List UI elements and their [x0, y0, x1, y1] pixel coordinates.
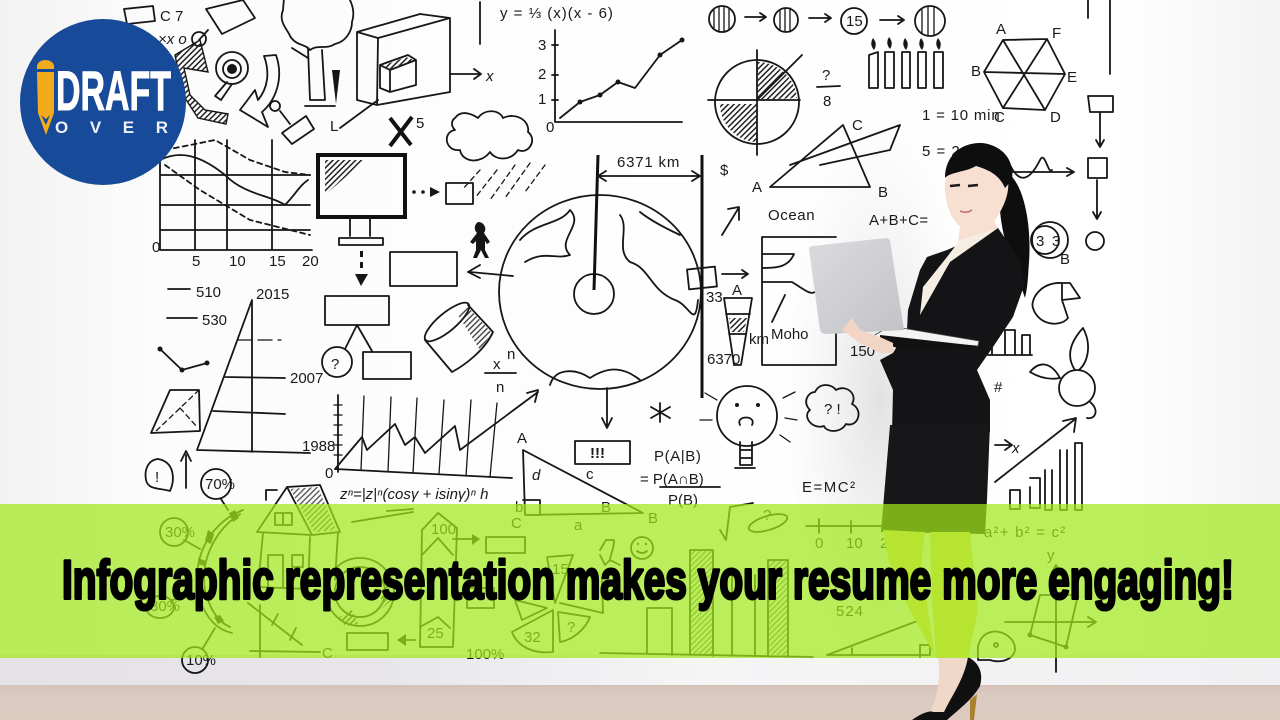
- sketch: equations middle right: A+B+C=: [869, 212, 929, 229]
- translucent green band: [0, 504, 1280, 658]
- sketch: a²+b²=c² and coordinate graph: a²+ b² = c²: [984, 524, 1066, 541]
- sketch: hexagon: B: [971, 63, 981, 80]
- sketch: X 5: [390, 115, 424, 146]
- sketch: tree: [282, 0, 353, 106]
- sketch: fruit and leaves: [994, 328, 1096, 418]
- sketch: pie with fraction: [708, 50, 840, 155]
- sketch: arrow tower and boxes: [420, 499, 525, 663]
- jacket: [880, 228, 1025, 432]
- sketch: exclamation bubble and percents: 30%: [165, 524, 195, 541]
- wooden floor: [0, 685, 1280, 720]
- sketch: lower left graph, ring and arrows: [248, 509, 415, 662]
- sketch: right triangle with !!!: d: [532, 467, 541, 484]
- sketch: line graph left: [152, 140, 319, 270]
- logo: iDraft Over badge: [20, 19, 186, 185]
- sketch: right triangle with !!!: !!!: [590, 445, 605, 462]
- sketch: number line and wedge under band: 524: [836, 603, 864, 620]
- sketch: pie fan and smile: 15: [552, 561, 569, 578]
- sketch: pyramid chart: [151, 284, 335, 455]
- logo wordmark DRAFT: DRAFT: [56, 59, 171, 122]
- sketch: equations middle right: 1 = 10 min: [922, 107, 1000, 124]
- sketch: arrow tower and boxes: b: [515, 499, 523, 516]
- sketch: right triangle with !!!: a: [574, 517, 583, 534]
- sketch: right triangle with !!!: A: [517, 430, 527, 447]
- sketch: equations middle right: 5 = 2: [922, 143, 961, 160]
- sketch: a²+b²=c² and coordinate graph: [978, 524, 1096, 672]
- sketch: pie with fraction: ?: [822, 67, 830, 84]
- sketch: cylinder and x^n/n: n: [507, 346, 515, 363]
- sketch: triangle with dollar: [720, 117, 900, 235]
- sketch: pyramid chart: 510: [196, 284, 221, 301]
- sketch: cylinder and x^n/n: x: [493, 356, 501, 373]
- sketch: triangle with dollar: $: [720, 162, 729, 179]
- ponytail: [999, 172, 1030, 298]
- eyes and lips: [950, 185, 978, 186]
- sketch: globe with radius: 6371 km: [617, 154, 680, 171]
- logo wordmark OVER: OVER: [55, 118, 168, 137]
- sketch: flow diagram under monitor: ?: [331, 356, 339, 373]
- sketch: cone core diagram: [706, 282, 769, 368]
- sketch: thought cloud: [651, 385, 859, 431]
- sketch: probability formula: = P(A∩B): [640, 471, 704, 488]
- sketch: right triangle with !!!: [511, 430, 658, 534]
- sketch: ocean cross-section: Ocean: [768, 207, 815, 224]
- sketch: 3D cube with axis: L: [330, 118, 338, 135]
- sketch: globe with radius: [468, 154, 702, 428]
- sketch: paper figure: [470, 222, 490, 258]
- sketch: X 5: 5: [416, 115, 424, 132]
- sketch: fruit and leaves: #: [994, 379, 1003, 396]
- sketch: cloud with rain: [447, 111, 545, 200]
- sketch: cone core diagram: 33: [706, 289, 723, 306]
- woman's shadow on wall: [785, 110, 975, 690]
- sketch: line chart top: 1: [538, 91, 546, 108]
- sketch: arrow tower and boxes: 100: [431, 521, 456, 538]
- sketch: growth bar-line chart: [325, 390, 538, 503]
- sketch: probability formula: E=MC²: [802, 479, 857, 496]
- sketch: line graph left: 10: [229, 253, 246, 270]
- neck and face: [945, 165, 1008, 245]
- sketch: number line and wedge under band: 0: [815, 535, 823, 552]
- sketch: equations middle right: [869, 107, 1074, 229]
- sketch: rising bars right: [995, 418, 1082, 510]
- sketch: triangle with dollar: C: [852, 117, 863, 134]
- sketch: pie and circled numbers right: B: [1060, 251, 1070, 268]
- sketch: pyramid chart: 2015: [256, 286, 289, 303]
- sketch: cylinder and x^n/n: [420, 297, 516, 396]
- sketch: hexagon: A: [996, 21, 1006, 38]
- sketch: growth bar-line chart: zⁿ=|z|ⁿ(cosγ + isinγ)ⁿ h: [339, 486, 488, 503]
- sketch: right triangle with !!!: B: [601, 499, 611, 516]
- sketch: flow boxes far right: [1086, 0, 1113, 250]
- sketch: 3D cube with axis: x: [485, 68, 494, 85]
- sketch: line chart top: 3: [538, 37, 546, 54]
- sketch: exclamation bubble and percents: !: [155, 469, 159, 486]
- ankle and foot: [927, 657, 968, 718]
- sketch: hexagon: [971, 21, 1077, 126]
- high heels: [912, 657, 981, 720]
- sketch: arrow tower and boxes: 25: [427, 625, 444, 642]
- sketch: bar chart lower middle: [600, 550, 813, 657]
- sketch: hexagon: E: [1067, 69, 1077, 86]
- sketch: arrow tower and boxes: 100%: [466, 646, 504, 663]
- sketch: cylinder and x^n/n: n: [496, 379, 504, 396]
- sketch: candles: [869, 37, 943, 88]
- sketch: line chart top: 0: [546, 119, 554, 136]
- sketches: top left gears and arrows: ×x o: [158, 31, 187, 48]
- sketch: right triangle with !!!: c: [586, 466, 594, 483]
- sketch: cone core diagram: 6370: [707, 351, 740, 368]
- sketch: pie fan and smile: ?: [763, 507, 771, 524]
- sketch: hexagon: C: [994, 109, 1005, 126]
- sketch: ocean cross-section: Moho: [771, 326, 809, 343]
- sketch: triangle with dollar: B: [878, 184, 888, 201]
- sketch: pie and circled numbers right: [988, 222, 1080, 355]
- laptop base: [870, 326, 979, 346]
- sketch: pie with fraction: 8: [823, 93, 831, 110]
- sketch: pyramid chart: 2007: [290, 370, 323, 387]
- sketch: number line and wedge under band: [806, 519, 930, 657]
- sketch: computer monitor: [318, 155, 473, 245]
- sketch: pie fan and smile: [512, 503, 789, 652]
- sketch: lightbulb idea: [700, 386, 797, 468]
- wall skirting tint: [0, 655, 1280, 685]
- sketch: probability formula: P(B): [668, 492, 698, 509]
- sketch: exclamation bubble and percents: [146, 451, 243, 673]
- sketch: top row sequence icons: 15: [846, 13, 863, 30]
- sketch: ocean cross-section: [687, 207, 875, 365]
- sketch: line graph left: 5: [192, 253, 200, 270]
- sketch: pyramid chart: 530: [202, 312, 227, 329]
- sketch: formula top: [480, 2, 614, 44]
- sketch: house: [257, 485, 340, 589]
- sketch: rising bars right: x: [1011, 440, 1020, 457]
- sketch: probability formula: P(A|B): [654, 448, 702, 465]
- sketch: exclamation bubble and percents: 70%: [205, 476, 235, 493]
- sketch: thought cloud: ? !: [824, 401, 841, 418]
- sketch: hexagon: D: [1050, 109, 1061, 126]
- sketch: ocean cross-section: 150: [850, 343, 875, 360]
- sketch: probability formula: [640, 448, 857, 509]
- logo pencil icon: [37, 60, 54, 135]
- sketch: pyramid chart: 1988: [302, 438, 335, 455]
- sketch: formula top: y = ⅓ (x)(x - 6): [500, 5, 614, 22]
- sketch: pie fan and smile: ?: [567, 619, 575, 636]
- sketch: hexagon: F: [1052, 25, 1061, 42]
- sketch: cone core diagram: A: [732, 282, 742, 299]
- sketch: line graph left: 0: [152, 239, 160, 256]
- woman figure: [809, 143, 1030, 720]
- sketch: line chart top: [538, 30, 684, 136]
- sketch: top row sequence icons: [709, 6, 945, 36]
- sketch: exclamation bubble and percents: 30%: [150, 598, 180, 615]
- sketch: number line and wedge under band: 10: [846, 535, 863, 552]
- sketch: a²+b²=c² and coordinate graph: y: [1047, 547, 1055, 564]
- hair: [945, 143, 1012, 188]
- sketch: growth bar-line chart: 0: [325, 465, 333, 482]
- sketch: right triangle with !!!: B: [648, 510, 658, 527]
- legs under band: [883, 530, 978, 658]
- sketch: pie and circled numbers right: 3: [1036, 233, 1044, 250]
- sketch: line graph left: 20: [302, 253, 319, 270]
- shirt: [920, 228, 998, 315]
- skirt: [881, 425, 990, 534]
- sketch: number line and wedge under band: 2: [880, 535, 888, 552]
- sketch: triangle with dollar: A: [752, 179, 762, 196]
- sketches: top left gears and arrows: [124, 0, 314, 144]
- sketch: pie and circled numbers right: 3: [1052, 233, 1060, 250]
- sketch: pie fan and smile: 32: [524, 629, 541, 646]
- sketch: right triangle with !!!: C: [511, 515, 522, 532]
- sketch: flow diagram under monitor: [322, 251, 457, 379]
- sketch: exclamation bubble and percents: 10%: [186, 652, 216, 669]
- sketches: top left gears and arrows: C 7: [160, 8, 183, 25]
- sketch: line chart top: 2: [538, 66, 546, 83]
- sketch: lower left graph, ring and arrows: C: [322, 645, 333, 662]
- laptop screen: [809, 238, 904, 334]
- hand: [842, 318, 893, 353]
- sketch: 3D cube with axis: [330, 14, 494, 135]
- sketch: line graph left: 15: [269, 253, 286, 270]
- sketch: cone core diagram: km: [749, 331, 769, 348]
